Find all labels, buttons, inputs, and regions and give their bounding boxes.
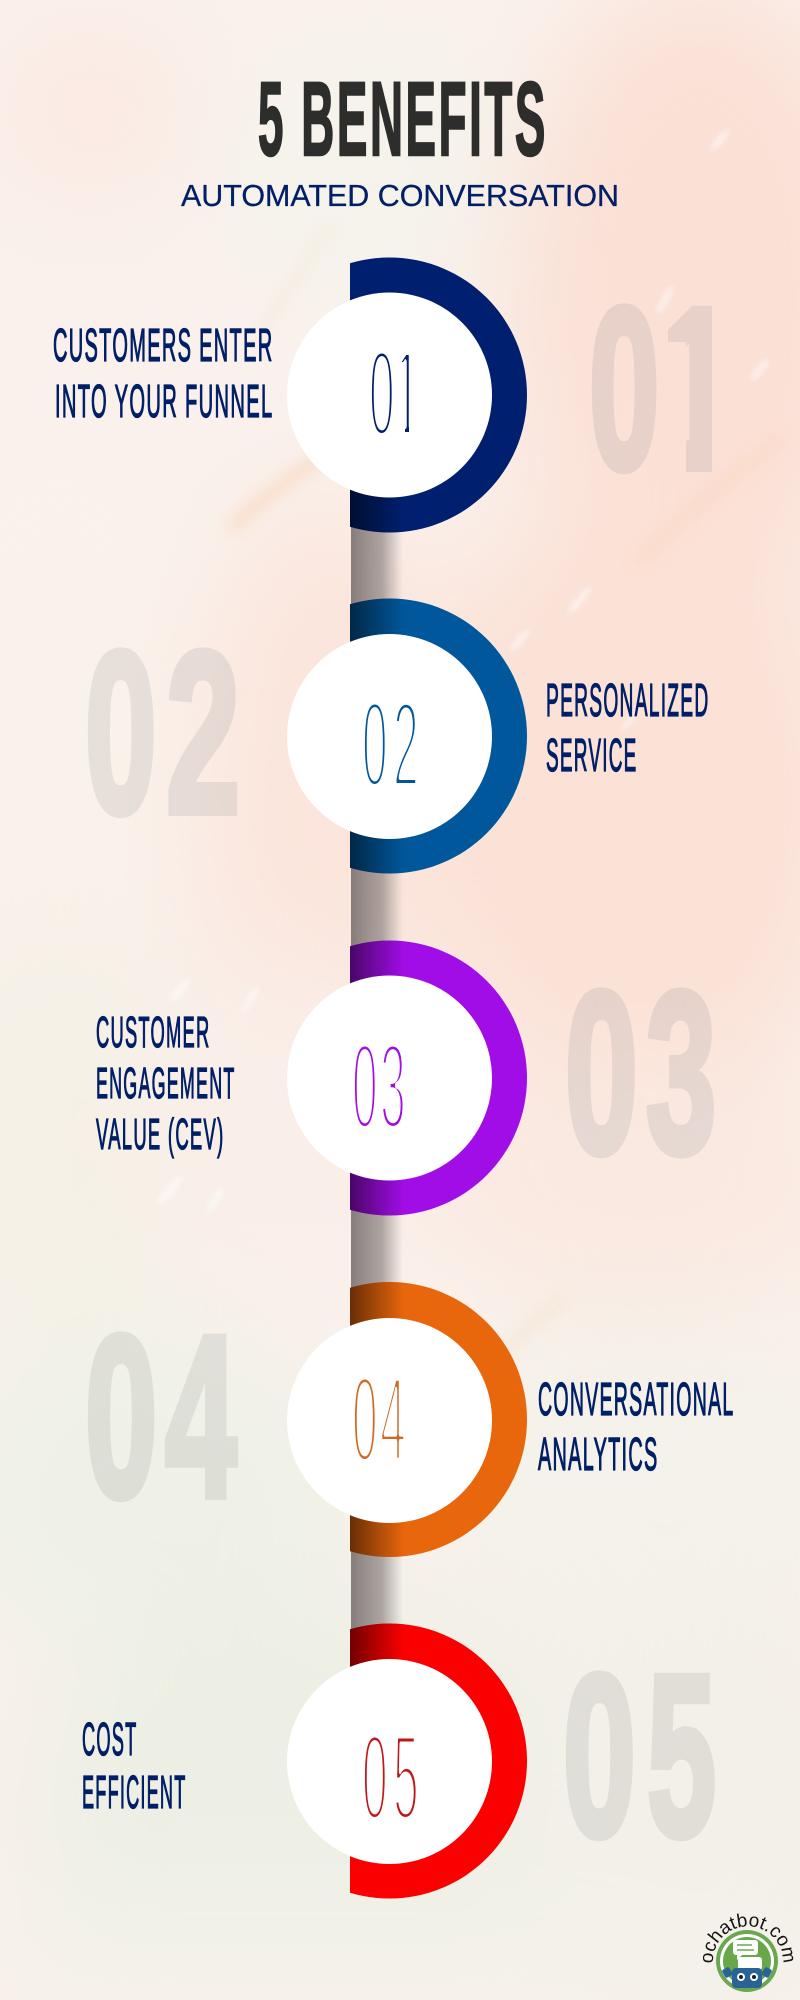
- ghost numbers: 0: [565, 944, 638, 1201]
- step 5: label: COST: [82, 1713, 138, 1765]
- step 1: label: [53, 319, 274, 427]
- text: EFFICIENT: [82, 1766, 186, 1818]
- step 1: ring: [350, 258, 527, 532]
- ghost numbers: 1: [657, 260, 740, 518]
- step 2: label: SERVICE: [546, 729, 638, 781]
- logo wordmark: ochatbot.com: [702, 1914, 794, 1962]
- connector bars: [351, 525, 403, 1636]
- logo: ochatbot.com: [702, 1914, 794, 1992]
- step 1: white disc with number: 1: [392, 325, 422, 461]
- logo badge: [716, 1930, 778, 1992]
- ghost numbers: 4: [165, 1289, 237, 1545]
- step 3: ring: [350, 940, 527, 1216]
- step 3: white disc with number: 03: [352, 1020, 408, 1154]
- step 3: white disc with number: [287, 976, 492, 1180]
- step 4: ring: [350, 1282, 527, 1557]
- ghost numbers: 0: [589, 261, 659, 518]
- step 4: white disc with number: 04: [352, 1353, 408, 1487]
- step 2: ring: [350, 598, 527, 874]
- step 4: label: [538, 1373, 734, 1480]
- ghost numbers: 5: [647, 1628, 716, 1885]
- step 1: white disc with number: 0: [369, 327, 395, 461]
- step 4: white disc with number: [287, 1318, 492, 1523]
- step 5: label: [82, 1713, 186, 1818]
- background: veins and speckles: [155, 127, 780, 1440]
- ghost numbers: [85, 260, 740, 1885]
- step 3: label: CUSTOMER: [96, 1008, 210, 1057]
- ghost numbers: 0: [563, 1627, 636, 1884]
- subtitle: AUTOMATED CONVERSATION: [181, 178, 619, 213]
- step 1: white disc with number: [287, 292, 492, 498]
- ghost numbers: 0: [85, 605, 157, 861]
- text: VALUE (CEV): [96, 1110, 224, 1159]
- text: CUSTOMERS ENTER: [53, 319, 274, 371]
- text: ENGAGEMENT: [96, 1059, 236, 1108]
- step 2: white disc with number: 02: [362, 678, 424, 812]
- step 5: white disc with number: 05: [362, 1711, 424, 1845]
- ghost numbers: 2: [166, 604, 240, 861]
- ghost numbers: 3: [646, 945, 716, 1202]
- step 5: white disc with number: [287, 1659, 492, 1864]
- ghost numbers: 0: [85, 1288, 157, 1545]
- text: INTO YOUR FUNNEL: [55, 375, 274, 427]
- step 2: label: [546, 674, 710, 781]
- step 5: ring: [350, 1624, 527, 1898]
- step 2: white disc with number: [287, 634, 492, 839]
- step 3: label: [96, 1008, 236, 1159]
